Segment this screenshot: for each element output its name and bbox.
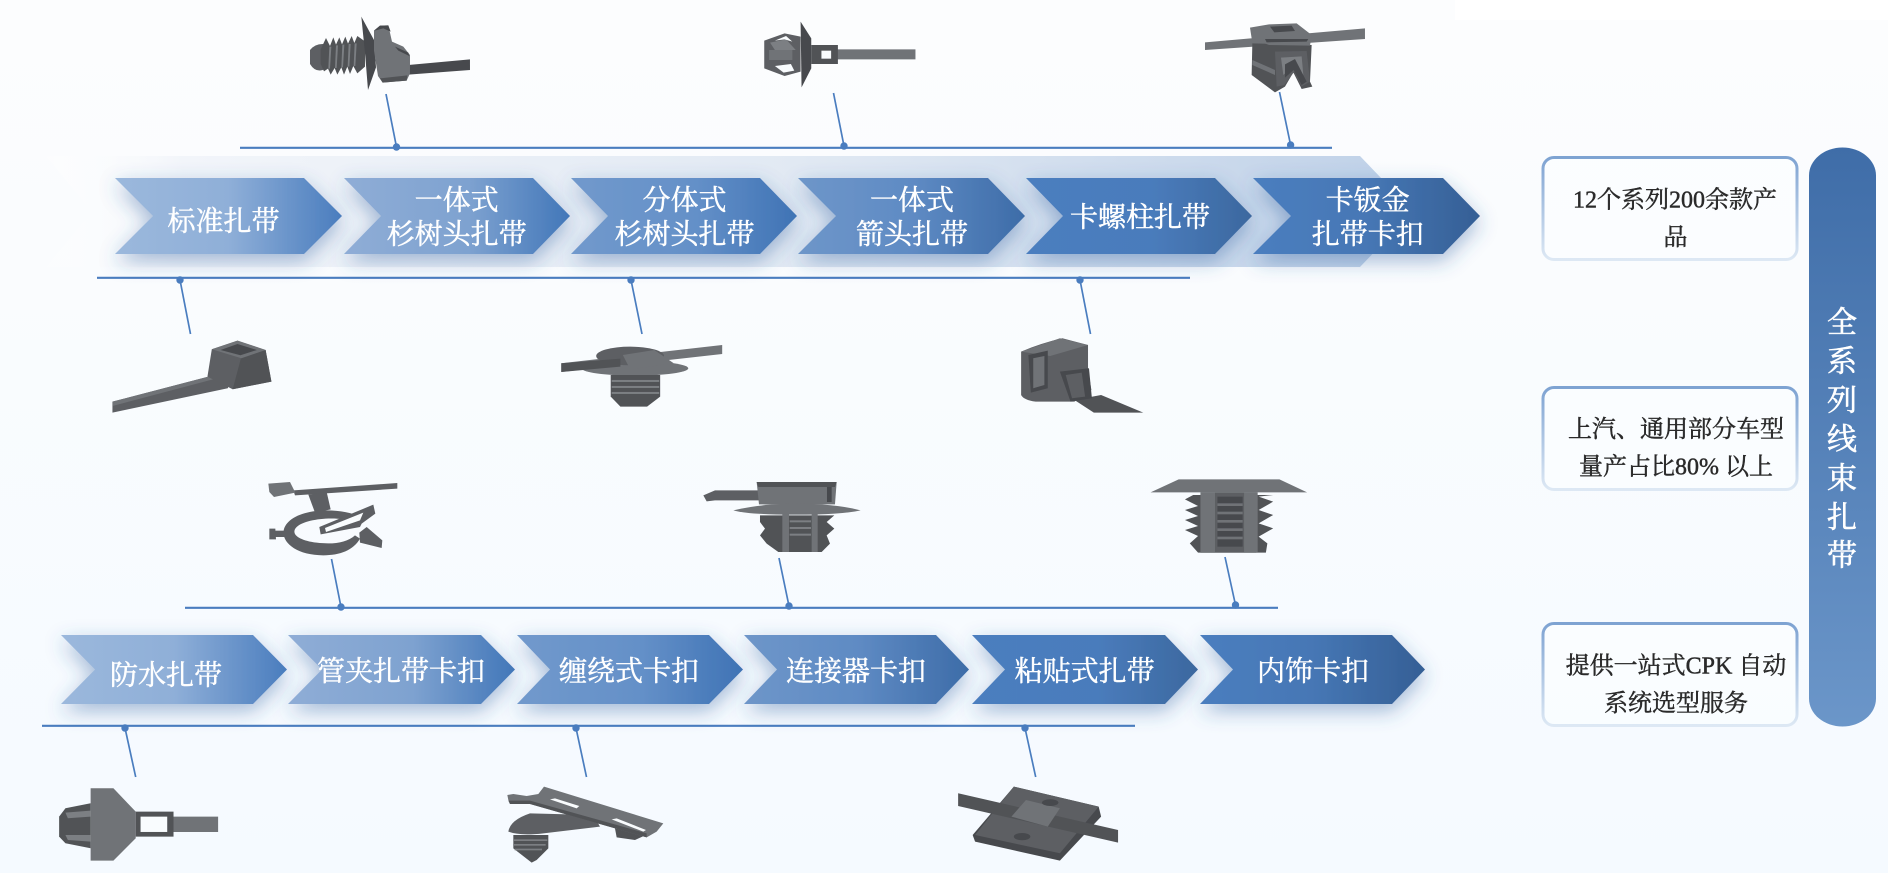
chevron: 防水扎带: 防水扎带	[110, 660, 222, 692]
side banner: 全系列线束扎带: 扎	[1827, 502, 1857, 534]
chevron: 标准扎带	[115, 178, 342, 254]
chevron: 一体式杉树头扎带	[344, 178, 570, 254]
chevron: 分体式杉树头扎带: 杉树头扎带	[614, 218, 755, 250]
chevron: 卡螺柱扎带: 卡螺柱扎带	[1070, 202, 1210, 234]
icon: two piece fir tree tie bottom 2	[561, 345, 722, 407]
chevron: 标准扎带: 标准扎带	[167, 206, 280, 238]
icon: waterproof tie bottom row 1	[59, 788, 218, 861]
info box: 上汽、通用部分车型量产占比80% 以上: 上汽、通用部分车型	[1568, 416, 1784, 443]
side banner: 全系列线束扎带: 列	[1827, 384, 1857, 418]
icon: adhesive mount bottom row 3	[958, 787, 1118, 861]
chevron: 内饰卡扣	[1200, 635, 1425, 704]
info box: 12个系列200余款产品: 12个系列200余款产	[1573, 186, 1777, 214]
chevron: 粘贴式扎带: 粘贴式扎带	[1015, 656, 1155, 688]
side banner: 全系列线束扎带: 线	[1827, 424, 1857, 456]
info box: 提供一站式CPK 自动系统选型服务	[1543, 624, 1797, 726]
chevron: 连接器卡扣: 连接器卡扣	[786, 656, 926, 688]
info box: 12个系列200余款产品: 品	[1664, 225, 1688, 251]
chevron: 一体式箭头扎带: 一体式	[870, 184, 954, 216]
timeline row 1 bottom	[97, 276, 1190, 334]
chevron: 卡钣金扎带卡扣: 扎带卡扣	[1312, 218, 1424, 250]
icon: fir tree tie top 1	[310, 17, 470, 90]
top right white patch	[1455, 0, 1888, 20]
icon: stud tie bottom 3	[1021, 338, 1143, 413]
side banner: 全系列线束扎带: 束	[1827, 462, 1857, 496]
icon: wrap clip bottom row 2	[507, 787, 663, 863]
chevron: 防水扎带	[61, 635, 287, 704]
icon: sheet metal clip top 3	[1205, 23, 1365, 92]
chevron: 分体式杉树头扎带	[571, 178, 797, 254]
timeline row 1 top	[240, 92, 1332, 151]
chevron: 缠绕式卡扣	[517, 635, 743, 704]
chevron: 一体式杉树头扎带: 一体式	[415, 184, 499, 216]
info box: 提供一站式CPK 自动系统选型服务: 提供一站式CPK 自动	[1566, 652, 1786, 680]
chevron: 卡钣金扎带卡扣: 卡钣金	[1326, 184, 1410, 216]
side banner: 全系列线束扎带: 全	[1827, 306, 1857, 340]
chevron: 一体式箭头扎带	[798, 178, 1025, 254]
chevron: 连接器卡扣	[744, 635, 969, 704]
icon: standard cable tie bottom 1	[112, 341, 271, 413]
info box: 12个系列200余款产品	[1543, 158, 1797, 260]
chevron: 内饰卡扣: 内饰卡扣	[1257, 656, 1369, 688]
chevron: 缠绕式卡扣: 缠绕式卡扣	[559, 656, 699, 688]
info box: 上汽、通用部分车型量产占比80% 以上: 量产占比80% 以上	[1579, 454, 1773, 480]
side banner: 全系列线束扎带	[1809, 148, 1876, 726]
icon: arrow tie top 2	[764, 22, 915, 87]
chevron: 分体式杉树头扎带: 分体式	[642, 184, 727, 216]
chevron: 卡螺柱扎带	[1026, 178, 1252, 254]
chevron: 管夹扎带卡扣	[288, 635, 515, 704]
icon: hose clip row 2 top 2	[703, 482, 861, 552]
chevron: 卡钣金扎带卡扣	[1253, 178, 1480, 254]
chevron: 一体式杉树头扎带: 杉树头扎带	[387, 218, 527, 250]
info box: 提供一站式CPK 自动系统选型服务: 系统选型服务	[1604, 690, 1748, 717]
chevron: 管夹扎带卡扣: 管夹扎带卡扣	[317, 656, 485, 688]
side banner: 全系列线束扎带: 带	[1827, 540, 1857, 572]
chevron: 粘贴式扎带	[972, 635, 1198, 704]
timeline row 2 bottom	[42, 724, 1135, 777]
background arrow band	[46, 156, 1413, 267]
side banner: 全系列线束扎带: 系	[1827, 346, 1857, 378]
chevron: 一体式箭头扎带: 箭头扎带	[856, 218, 968, 250]
icon: waterproof clip row 2 top 1	[268, 482, 397, 555]
icon: connector clip row 2 top 3	[1151, 479, 1307, 553]
info box: 上汽、通用部分车型量产占比80% 以上	[1543, 388, 1797, 490]
timeline row 2 top	[185, 557, 1278, 611]
